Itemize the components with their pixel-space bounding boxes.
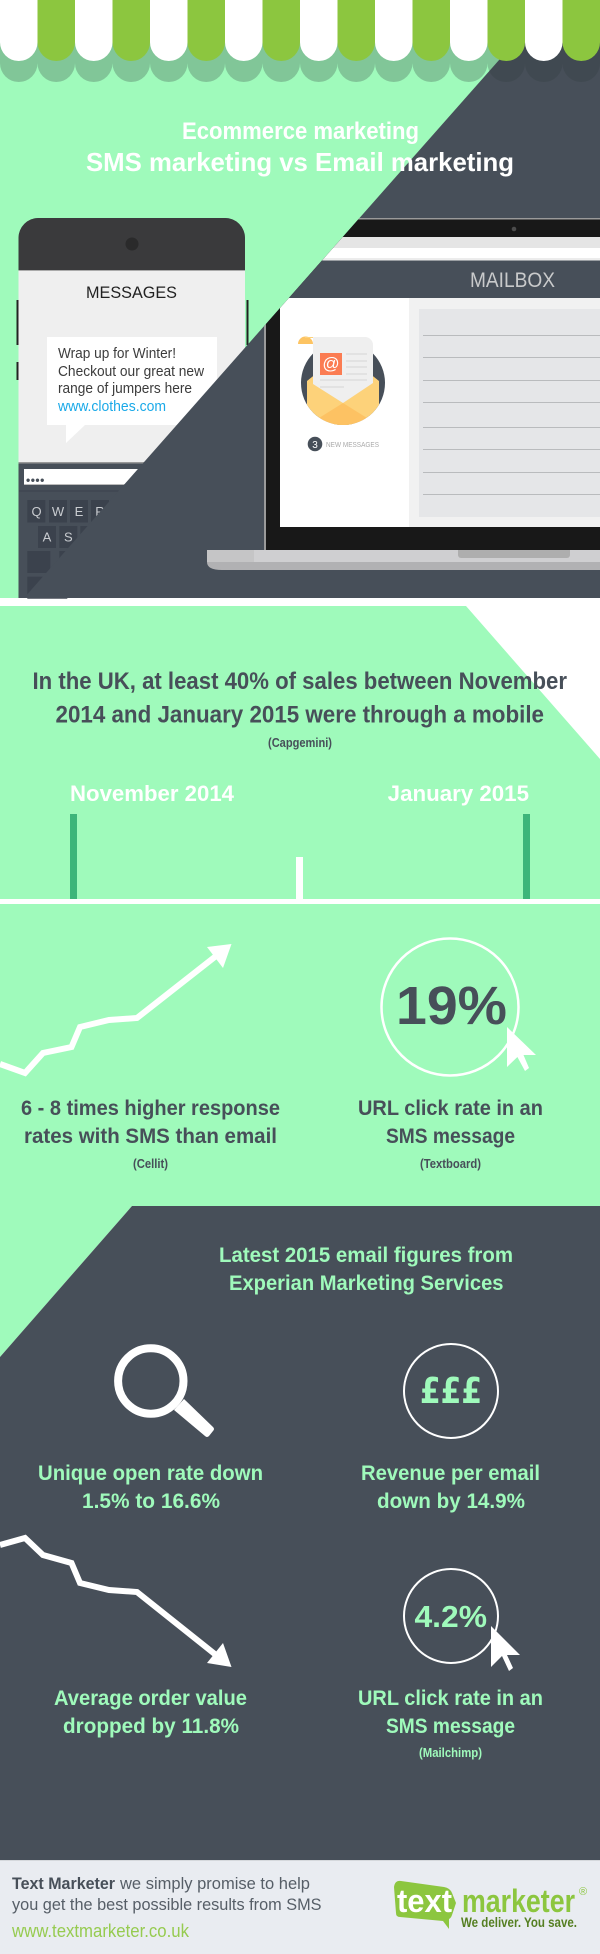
icon: phone: MESSAGES xyxy=(86,283,177,302)
laptop base xyxy=(207,550,600,570)
panel: hero background xyxy=(0,0,600,598)
panel: footer xyxy=(0,1860,600,1954)
stat: URL click rate email: (Mailchimp) xyxy=(419,1746,482,1760)
message input: •••• xyxy=(26,473,45,487)
logo xyxy=(394,1881,587,1930)
stat: URL click rate SMS: (Textboard) xyxy=(420,1157,481,1171)
new messages badge: NEW MESSAGES xyxy=(326,440,379,449)
message list lines xyxy=(423,335,600,495)
stat: unique open rate: Unique open rate down xyxy=(38,1462,263,1485)
icon: rising arrow xyxy=(0,944,232,1073)
stat: URL click rate email: SMS message xyxy=(386,1715,515,1738)
keyboard letters: E xyxy=(75,504,84,519)
keyboard keys xyxy=(27,500,109,599)
icon: phone xyxy=(16,218,248,599)
stat: URL click rate SMS: SMS message xyxy=(386,1125,515,1148)
sms bubble xyxy=(47,337,217,443)
sms bubble: www.clothes.com xyxy=(57,398,166,415)
footer text: we simply promise to help xyxy=(119,1874,310,1893)
stat: response rates xyxy=(21,1097,280,1171)
panel: dark diagonal xyxy=(24,0,600,598)
stat: URL click rate SMS xyxy=(358,1097,543,1171)
keyboard letters: Q xyxy=(31,504,42,519)
logo: marketer xyxy=(462,1883,575,1919)
logo: text xyxy=(397,1883,452,1919)
heading: UK mobile sales: 2014 and January 2015 were through a mobile xyxy=(56,702,544,728)
sms bubble: Checkout our great new xyxy=(58,363,204,380)
new messages badge: 3 xyxy=(312,440,318,451)
stat: response rates: 6 - 8 times higher response xyxy=(21,1097,280,1120)
stat: URL click rate email: URL click rate in an xyxy=(358,1687,543,1710)
icon: pounds circle: £££ xyxy=(420,1371,482,1412)
stat: URL click rate SMS: URL click rate in an xyxy=(358,1097,543,1120)
title xyxy=(86,118,514,177)
icon: magnifying glass xyxy=(118,1348,214,1437)
heading: UK mobile sales: In the UK, at least 40% of sales between November xyxy=(32,668,567,695)
awning stripes xyxy=(0,0,600,61)
awning shadow xyxy=(0,40,600,82)
icon: pounds circle xyxy=(404,1344,498,1438)
panel: email figures background xyxy=(0,1206,600,1860)
icon: open envelope: @ xyxy=(322,354,340,373)
title: Ecommerce marketing xyxy=(182,118,419,145)
stat: unique open rate xyxy=(38,1462,263,1513)
heading: email figures: Experian Marketing Services xyxy=(229,1272,504,1295)
footer text xyxy=(12,1874,322,1914)
title: SMS marketing vs Email marketing xyxy=(86,147,514,177)
stat: average order value: Average order value xyxy=(54,1687,247,1710)
logo: We deliver. You save. xyxy=(461,1914,577,1930)
stat: URL click rate email xyxy=(358,1687,543,1760)
sms bubble: Wrap up for Winter! xyxy=(58,345,176,362)
heading: email figures xyxy=(219,1244,513,1295)
icon: open envelope xyxy=(298,336,385,430)
icon: 19% circle with cursor xyxy=(382,938,536,1076)
stat: revenue per email: Revenue per email xyxy=(361,1462,540,1485)
message input xyxy=(24,469,154,487)
stat: response rates: (Cellit) xyxy=(133,1157,168,1171)
keyboard letters: W xyxy=(52,504,65,519)
stat: average order value: dropped by 11.8% xyxy=(63,1715,239,1738)
stat: unique open rate: 1.5% to 16.6% xyxy=(82,1490,220,1513)
icon: laptop xyxy=(207,218,600,570)
heading: UK mobile sales xyxy=(32,668,567,728)
new messages badge xyxy=(308,437,379,451)
stat: revenue per email: down by 14.9% xyxy=(377,1490,525,1513)
footer text: you get the best possible results from SMS xyxy=(12,1895,322,1914)
stat: average order value xyxy=(54,1687,247,1738)
timeline chart: November 2014 xyxy=(70,781,235,806)
timeline chart xyxy=(0,781,600,904)
stat: revenue per email xyxy=(361,1462,540,1513)
sms bubble: range of jumpers here xyxy=(58,380,192,397)
icon: falling arrow xyxy=(0,1538,232,1667)
icon: 4.2% circle with cursor xyxy=(404,1569,520,1671)
icon: 19% circle with cursor: 19% xyxy=(396,976,507,1036)
panel: mobile sales section background xyxy=(0,606,600,1357)
keyboard letters: R xyxy=(95,504,105,519)
heading: email figures: Latest 2015 email figures from xyxy=(219,1244,513,1267)
keyboard letters xyxy=(31,504,105,544)
keyboard letters: A xyxy=(43,530,52,544)
keyboard letters: S xyxy=(64,530,73,544)
logo: ® xyxy=(579,1886,587,1898)
timeline chart: January 2015 xyxy=(388,781,529,806)
stat: response rates: rates with SMS than email xyxy=(24,1125,277,1148)
icon: 4.2% circle with cursor: 4.2% xyxy=(414,1599,487,1634)
mailbox heading: MAILBOX xyxy=(470,269,555,292)
source: Capgemini: (Capgemini) xyxy=(268,736,332,750)
footer url: www.textmarketer.co.uk xyxy=(11,1921,190,1941)
footer text: Text Marketer xyxy=(12,1874,115,1893)
